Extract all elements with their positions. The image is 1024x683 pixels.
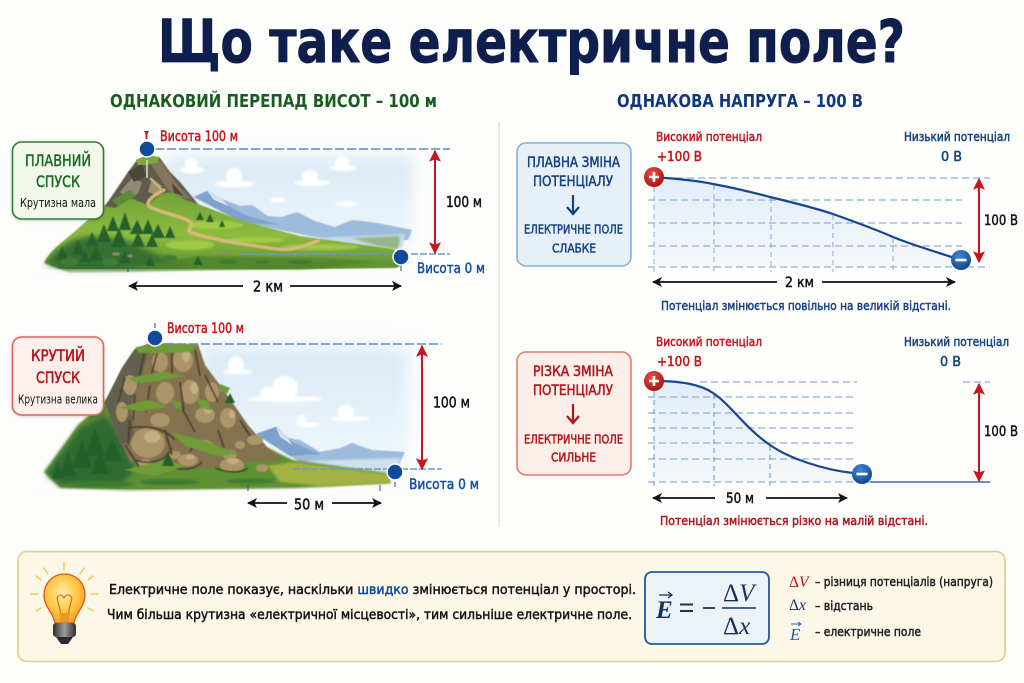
marker: bottom point	[393, 249, 409, 265]
label: low potential: Низький потенціал	[904, 130, 1010, 144]
callout: sharp change, strong field: РІЗКА ЗМІНА	[533, 364, 613, 380]
label: low potential: Низький потенціал	[904, 335, 1009, 349]
label: 100 m: 100 м	[433, 394, 470, 412]
caption: potential changes sharply: Потенціал змінюється різко на малій відстані.	[660, 513, 928, 528]
marker: bottom point	[387, 464, 403, 480]
callout: gentle descent: ПЛАВНИЙ	[25, 151, 91, 170]
label: 2 km: 2 км	[253, 278, 283, 296]
label: 50 m: 50 м	[294, 496, 324, 514]
icon: minus charge	[852, 464, 872, 484]
callout: sharp change, strong field	[517, 352, 631, 475]
text: explanation line two: Чим більша крутизна «електричної місцевості», тим сильніше електричне поле.	[107, 607, 632, 623]
legend: symbols: – різниця потенціалів (напруга)	[815, 575, 993, 589]
shrubs and stones	[61, 250, 312, 266]
icon: red pin	[144, 131, 149, 139]
icon: plus charge	[644, 371, 664, 391]
arrow: vertical 100 m	[421, 346, 423, 469]
marker: top point	[147, 330, 163, 346]
arrow: distance 2 km	[129, 285, 401, 287]
reference line: height 100 m	[155, 148, 450, 150]
arrow: distance 50 m	[653, 497, 847, 499]
heading: same voltage: ОДНАКОВА НАПРУГА – 100 В	[617, 92, 863, 112]
callout: gradual change, weak field: СЛАБКЕ	[552, 240, 596, 256]
label: height 0 m: Висота 0 м	[417, 261, 485, 277]
label: 50 m: 50 м	[726, 491, 754, 507]
callout: sharp change, strong field: СИЛЬНЕ	[551, 450, 596, 464]
label: 100 V: 100 В	[984, 424, 1018, 440]
panel: gradual potential change	[517, 130, 1018, 313]
label: 2 km: 2 км	[785, 275, 814, 291]
label: +100 V: +100 В	[657, 149, 702, 165]
formula box: Δx	[723, 613, 750, 640]
callout: steep descent: КРУТИЙ	[31, 346, 85, 365]
label: height 100 m: Висота 100 м	[160, 129, 238, 145]
panel: steep descent	[12, 321, 479, 514]
formula box	[645, 572, 769, 644]
text: explanation line one: Електричне поле показує, наскільки швидко змінюється потенціал у просторі.	[109, 582, 636, 598]
illustration: steep rocky mountain landscape	[30, 343, 430, 499]
caption: potential changes slowly: Потенціал змінюється повільно на великій відстані.	[661, 298, 951, 313]
callout: gentle descent: СПУСК	[36, 172, 81, 191]
arrow: vertical 100 V	[978, 179, 980, 262]
legend: symbols: – електричне поле	[815, 625, 921, 639]
chart: gradual potential curve	[644, 167, 990, 272]
callout: steep descent	[12, 337, 104, 415]
icon: plus charge	[644, 167, 664, 187]
label: height 100 m: Висота 100 м	[167, 321, 244, 337]
chart: sharp potential curve	[644, 371, 990, 486]
panel: summary	[18, 552, 1005, 662]
heading: same height difference: ОДНАКОВИЙ ПЕРЕПАД ВИСОТ – 100 м	[110, 90, 437, 112]
label: height 0 m: Висота 0 м	[409, 477, 479, 493]
label: 0 V: 0 В	[941, 149, 962, 165]
formula box: ΔV	[723, 580, 757, 607]
summary background	[18, 552, 1005, 662]
arrow: vertical 100 m	[434, 151, 436, 253]
reference line: height 100 m	[165, 343, 442, 345]
label: high potential: Високий потенціал	[656, 335, 762, 349]
callout: gradual change, weak field: ЕЛЕКТРИЧНЕ ПОЛЕ	[524, 222, 623, 236]
rock mass	[105, 344, 285, 470]
label: high potential: Високий потенціал	[656, 130, 762, 144]
reference line: height 0 m	[293, 468, 442, 470]
callout: sharp change, strong field: ПОТЕНЦІАЛУ	[533, 383, 613, 399]
ground	[44, 398, 391, 491]
legend: symbols: – відстань	[815, 599, 873, 613]
trail	[148, 190, 318, 249]
marker: top point	[139, 141, 155, 157]
conifers	[56, 212, 225, 266]
callout: gentle descent	[12, 142, 104, 219]
panel: sharp potential change	[517, 335, 1018, 528]
legend: symbols: Δx	[789, 597, 806, 614]
callout: gradual change, weak field	[517, 143, 631, 266]
callout: gradual change, weak field: ПОТЕНЦІАЛУ	[533, 174, 613, 190]
legend: symbols: E	[789, 625, 801, 644]
legend: symbols: ΔV	[789, 574, 810, 591]
label: 100 V: 100 В	[984, 213, 1018, 229]
panel: gentle descent	[12, 129, 485, 296]
arrow: vertical 100 V	[978, 384, 980, 481]
callout: steep descent: Крутизна велика	[18, 392, 98, 406]
legend: symbols	[789, 574, 993, 644]
callout: gradual change, weak field: ПЛАВНА ЗМІНА	[527, 155, 620, 171]
reference line: height 0 m	[240, 253, 450, 255]
label: 0 V: 0 В	[940, 354, 961, 370]
rocky peak	[105, 155, 198, 208]
callout: steep descent: СПУСК	[36, 368, 81, 387]
label: +100 V: +100 В	[657, 354, 702, 370]
distance ticks	[128, 265, 401, 272]
icon: minus charge	[951, 250, 971, 270]
formula box: E	[655, 597, 673, 624]
callout: sharp change, strong field: ЕЛЕКТРИЧНЕ ПОЛЕ	[524, 432, 623, 446]
icon: light bulb	[31, 562, 98, 644]
illustration: gentle mountain landscape	[30, 155, 430, 279]
callout: gentle descent: Крутизна мала	[20, 196, 96, 210]
arrow: distance 2 km	[653, 281, 955, 283]
label: 100 m: 100 м	[446, 193, 482, 211]
distance ticks	[155, 323, 395, 491]
arrow: distance 50 m	[248, 502, 381, 504]
